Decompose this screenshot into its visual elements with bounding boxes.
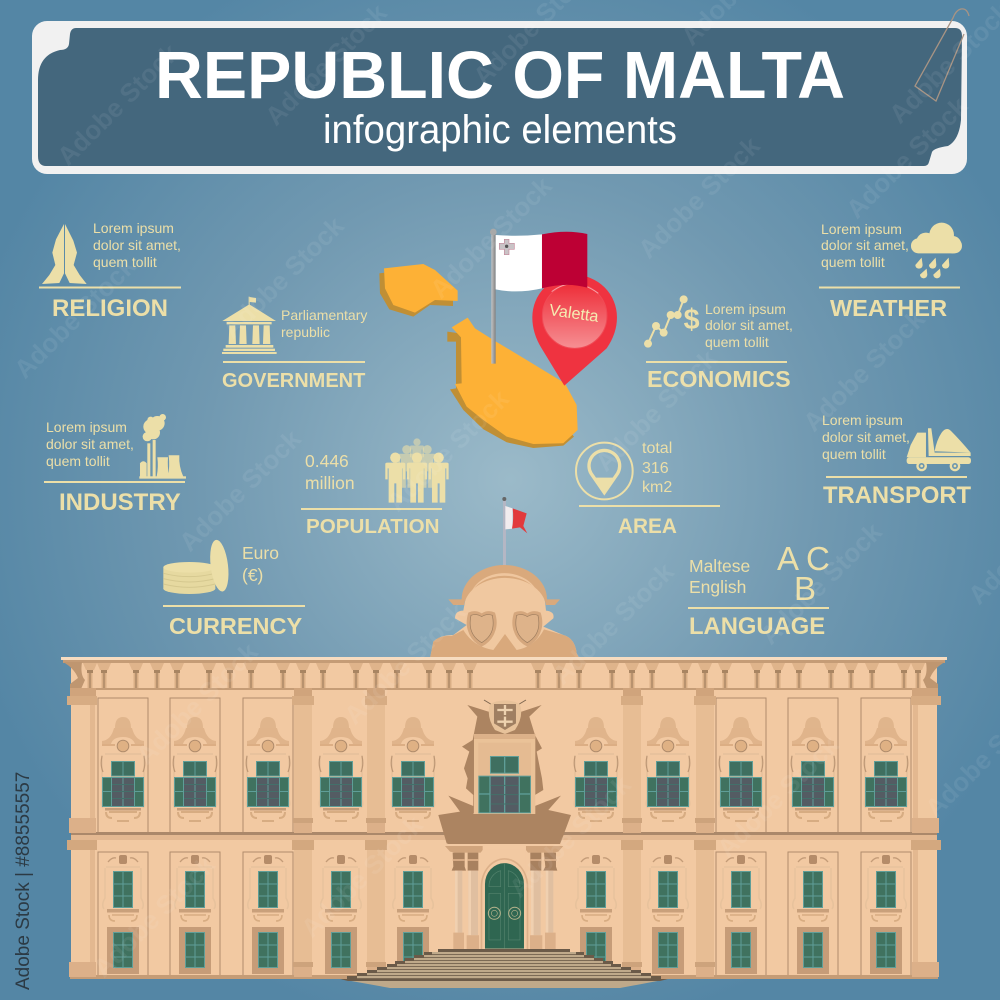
weather text: quem tollit — [821, 254, 885, 270]
panel: transport — [822, 412, 972, 509]
panel: religion — [39, 220, 181, 322]
lower windows — [103, 855, 906, 974]
icon: dump truck — [907, 428, 971, 471]
weather text: dolor sit amet, — [821, 237, 909, 253]
island: Malta — [447, 318, 578, 448]
currency heading: CURRENCY — [169, 613, 302, 639]
rooftop flag — [502, 497, 527, 566]
coat of arms — [484, 700, 526, 734]
transport heading: TRANSPORT — [823, 482, 972, 509]
language heading: LANGUAGE — [689, 613, 825, 640]
panel: economics — [644, 295, 793, 392]
icon: rain cloud — [911, 223, 962, 278]
map of Malta with flag and pin — [379, 229, 617, 448]
population text: million — [305, 473, 355, 493]
weather text: Lorem ipsum — [821, 221, 902, 237]
column bases — [453, 933, 556, 949]
stock watermarks: Adobe Stock — [295, 809, 429, 943]
banner drapery — [462, 705, 543, 813]
icon: government building — [222, 297, 277, 354]
stock watermarks: Adobe Stock — [754, 516, 888, 650]
stock watermarks: Adobe Stock — [589, 343, 723, 477]
currency text: Euro — [242, 543, 279, 563]
area text: 316 — [642, 460, 669, 477]
government text: Parliamentary — [281, 307, 367, 323]
stock watermarks: Adobe Stock — [424, 170, 558, 304]
flag of Malta on pole — [490, 229, 587, 364]
divider: government — [223, 361, 365, 363]
divider: industry — [44, 481, 185, 483]
stock watermarks: Adobe Stock — [840, 90, 974, 224]
panel: weather — [819, 221, 962, 321]
government text: republic — [281, 324, 330, 340]
currency text: (€) — [242, 565, 263, 585]
top cornice — [61, 657, 947, 690]
stock watermarks: Adobe Stock — [216, 210, 350, 344]
icon: group of people — [385, 438, 449, 503]
entrance stairs — [340, 949, 668, 988]
divider: language — [688, 607, 829, 609]
entrance wall — [483, 850, 526, 950]
dome pediment — [430, 565, 579, 658]
icon: coins — [163, 539, 231, 594]
icon: paperclip — [915, 9, 969, 101]
stock watermarks: Adobe Stock — [130, 636, 264, 770]
icon: letters A B C: A — [777, 540, 799, 577]
stock watermarks: Adobe Stock — [711, 729, 845, 863]
area text: km2 — [642, 479, 672, 496]
religion text: dolor sit amet, — [93, 237, 181, 253]
industry heading: INDUSTRY — [59, 489, 181, 516]
divider: weather — [819, 286, 960, 288]
island: Gozo — [379, 264, 458, 317]
column capitals — [452, 853, 557, 871]
divider: population — [301, 508, 442, 510]
stock watermarks: Adobe Stock — [381, 383, 515, 517]
icon: letters A B C: C — [806, 540, 830, 577]
economics text: quem tollit — [705, 334, 769, 350]
palace building — [61, 497, 947, 988]
transport text: quem tollit — [822, 446, 886, 462]
language text: Maltese — [689, 556, 750, 576]
divider: currency — [163, 605, 305, 607]
stock id vertical caption: Adobe Stock | #88555557 — [13, 772, 34, 990]
icon: growth chart with dollar: $ — [684, 304, 700, 336]
entablature — [445, 846, 563, 853]
title banner — [32, 9, 969, 174]
stock watermarks: Adobe Stock — [503, 769, 637, 903]
icon: praying hands — [42, 224, 87, 284]
central balcony bay — [474, 734, 535, 814]
banner paper — [32, 21, 967, 174]
area text: total — [642, 440, 672, 457]
door — [485, 863, 524, 949]
population text: 0.446 — [305, 451, 349, 471]
recessed wall panels — [98, 698, 911, 977]
population heading: POPULATION — [306, 515, 439, 538]
icon: growth chart with dollar — [644, 295, 700, 348]
stock watermarks: Adobe Stock — [546, 556, 680, 690]
title: REPUBLIC OF MALTA — [155, 38, 845, 113]
divider: area — [579, 505, 720, 507]
transport text: dolor sit amet, — [822, 429, 910, 445]
government heading: GOVERNMENT — [222, 370, 365, 392]
central portal — [438, 700, 571, 950]
pilasters — [67, 688, 941, 977]
upper windows — [101, 717, 908, 821]
icon: factory — [139, 414, 186, 479]
panel: population — [301, 438, 449, 538]
religion text: quem tollit — [93, 254, 157, 270]
facade wall — [71, 662, 937, 978]
industry text: dolor sit amet, — [46, 436, 134, 452]
banner dark panel — [38, 28, 962, 166]
divider: economics — [646, 361, 787, 363]
religion text: Lorem ipsum — [93, 220, 174, 236]
economics text: dolor sit amet, — [705, 317, 793, 333]
panel: industry — [44, 414, 186, 516]
stock watermarks: Adobe Stock — [259, 0, 393, 131]
divider: transport — [826, 476, 967, 478]
economics heading: ECONOMICS — [647, 366, 791, 392]
industry text: Lorem ipsum — [46, 419, 127, 435]
industry text: quem tollit — [46, 453, 110, 469]
icon: letters A B C: B — [794, 570, 816, 607]
stock watermarks: Adobe Stock — [797, 303, 931, 437]
panel: currency — [163, 539, 305, 639]
weather heading: WEATHER — [830, 295, 947, 321]
religion heading: RELIGION — [52, 295, 168, 322]
door arch frame — [481, 858, 528, 949]
icon: location pin in circle — [576, 443, 633, 499]
balustrade — [83, 663, 925, 688]
stock watermarks: Adobe Stock — [338, 596, 472, 730]
stock watermarks: Adobe Stock — [87, 849, 221, 983]
subtitle: infographic elements — [323, 108, 677, 152]
panel: language — [688, 540, 830, 640]
stock watermarks: Adobe Stock — [51, 37, 185, 171]
transport text: Lorem ipsum — [822, 412, 903, 428]
stock watermarks: Adobe Stock — [8, 250, 142, 384]
economics text: Lorem ipsum — [705, 301, 786, 317]
map pin: Valetta: Valetta — [548, 301, 601, 326]
map pin: Valetta — [532, 275, 617, 386]
panel: government — [222, 297, 367, 392]
language text: English — [689, 577, 746, 597]
stock watermarks: Adobe Stock — [173, 423, 307, 557]
floor band — [70, 832, 938, 979]
area heading: AREA — [618, 515, 677, 538]
wing drapery — [438, 796, 571, 844]
divider: religion — [39, 286, 181, 288]
panel: area — [576, 440, 720, 538]
column shafts — [455, 871, 553, 935]
stock watermarks: Adobe Stock — [632, 130, 766, 264]
